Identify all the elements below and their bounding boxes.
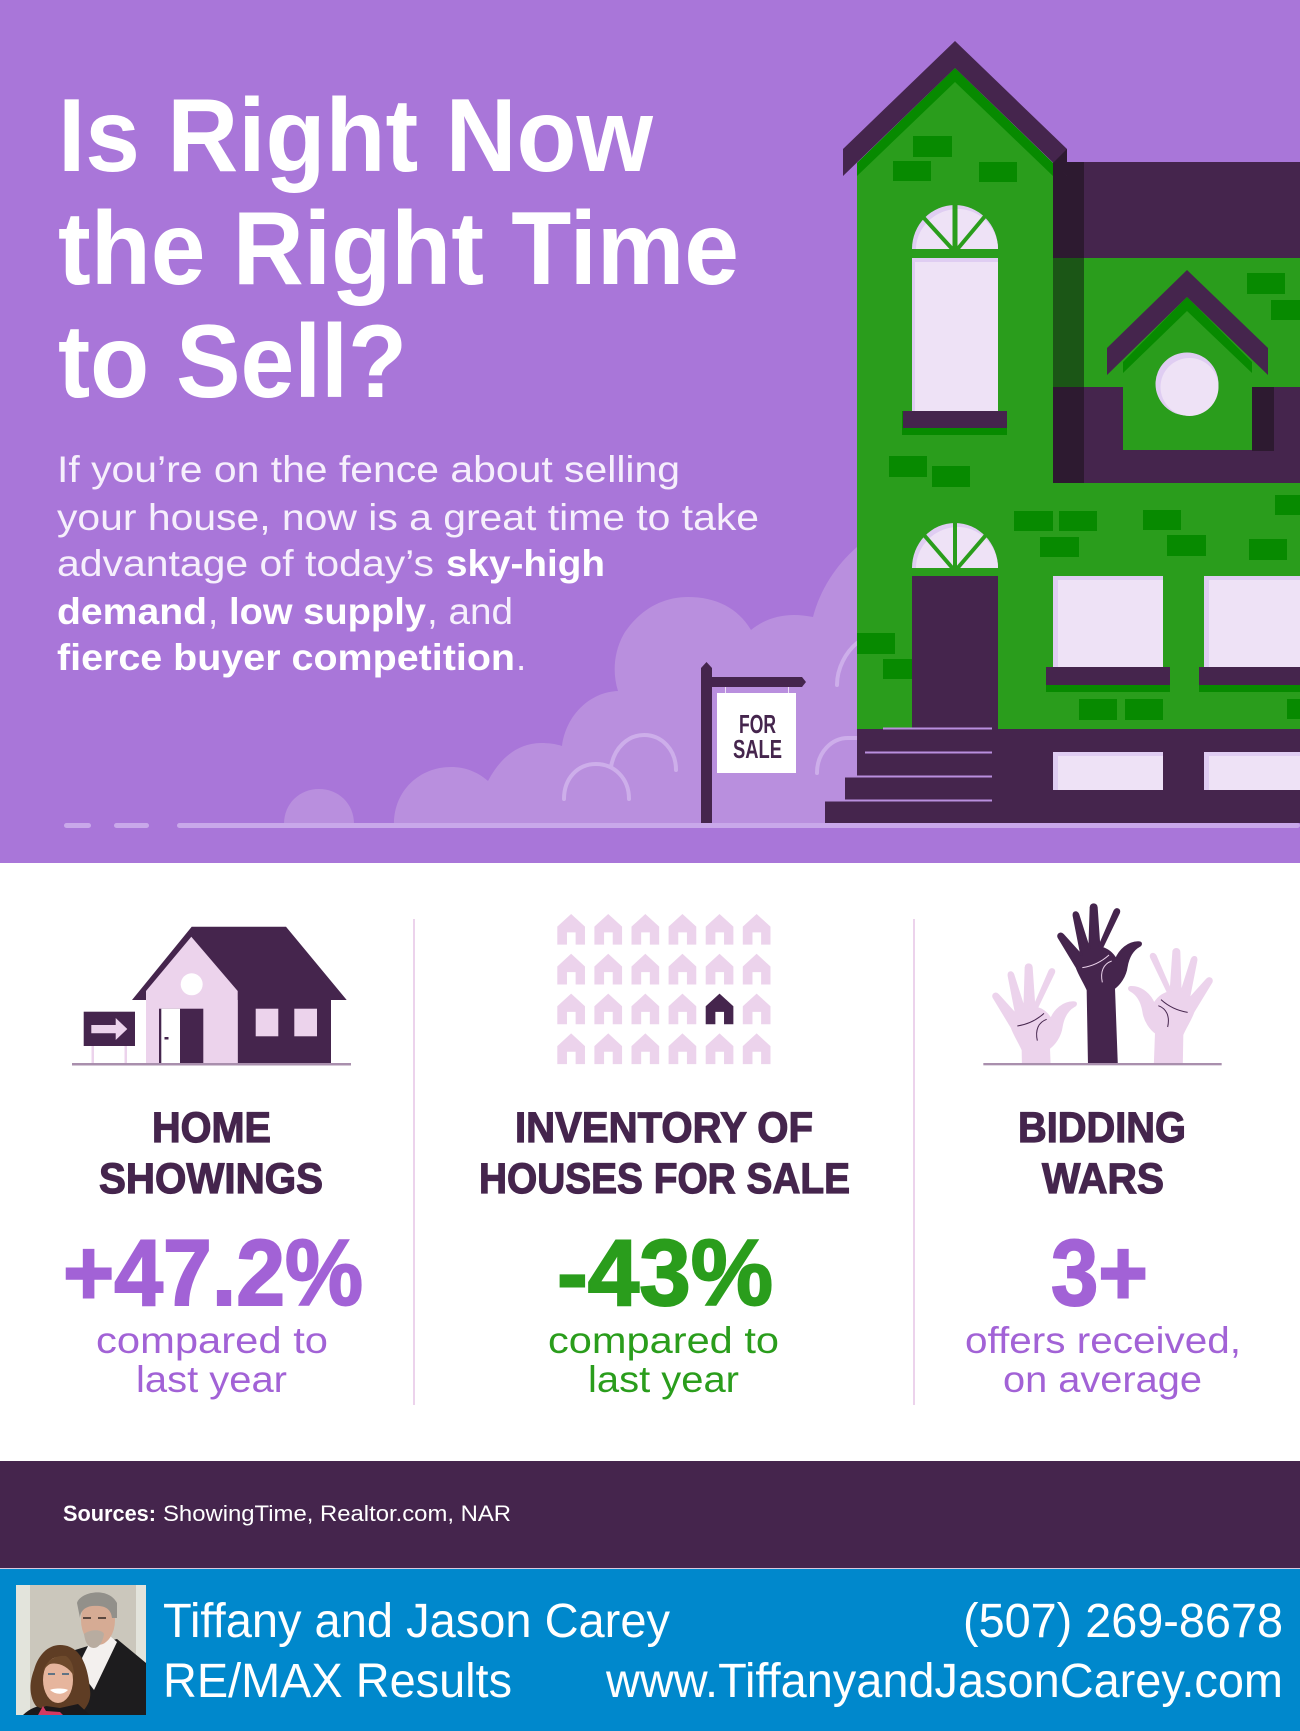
upper roof band	[1053, 162, 1300, 258]
illustration: house	[825, 41, 1300, 823]
heading: bidding wars	[1018, 1104, 1186, 1203]
green upper wall	[1053, 258, 1300, 387]
intro paragraph: ,	[208, 591, 218, 632]
sources text: Sources:	[63, 1501, 156, 1526]
intro paragraph: advantage of today’s	[57, 543, 434, 584]
caption	[965, 1320, 1241, 1400]
sources text: ShowingTime, Realtor.com, NAR	[163, 1501, 511, 1526]
heading: inventory: HOUSES FOR SALE	[479, 1155, 850, 1203]
door	[912, 576, 998, 729]
intro paragraph: demand	[57, 591, 207, 632]
agent name and brokerage: Tiffany and Jason Carey	[163, 1595, 670, 1648]
intro paragraph: sky-high	[446, 543, 605, 584]
green lower wall	[857, 483, 1300, 729]
agent photo	[16, 1585, 146, 1715]
woman	[23, 1705, 60, 1715]
panel: sources band	[0, 1461, 1300, 1568]
illustration: for sale sign	[701, 662, 806, 823]
dormer	[1123, 360, 1252, 450]
intro paragraph: your house, now is a great time to take	[57, 497, 759, 538]
stat: +47.2%: +47.2%	[63, 1220, 363, 1325]
stat: 3+: 3+	[1051, 1220, 1148, 1325]
heading: home showings	[99, 1104, 323, 1203]
caption	[96, 1320, 328, 1400]
caption: last year	[588, 1359, 739, 1400]
title: to Sell?	[58, 304, 407, 420]
illustration: cloud arcs	[564, 643, 857, 799]
caption: compared to	[96, 1320, 328, 1361]
caption	[548, 1320, 779, 1400]
man	[75, 1639, 146, 1715]
intro paragraph: low supply	[229, 591, 426, 632]
panel: bidding wars	[965, 904, 1241, 1400]
contact details: www.TiffanyandJasonCarey.com	[605, 1655, 1283, 1708]
illustration: for sale sign: FOR	[739, 709, 776, 739]
heading: home showings: HOME	[152, 1104, 271, 1152]
heading: inventory: INVENTORY OF	[515, 1104, 813, 1152]
agent name and brokerage	[163, 1595, 670, 1708]
heading: home showings: SHOWINGS	[99, 1155, 323, 1203]
caption: on average	[1003, 1359, 1202, 1400]
purple lower band	[1053, 387, 1300, 483]
contact details: (507) 269-8678	[963, 1595, 1283, 1648]
title: Is Right Now	[58, 78, 654, 194]
intro paragraph: , and	[427, 591, 513, 632]
icon: house with arrow sign	[72, 927, 351, 1066]
agent name and brokerage: RE/MAX Results	[163, 1655, 512, 1708]
intro paragraph: .	[516, 637, 526, 678]
heading: inventory	[479, 1104, 850, 1203]
illustration: ground line	[64, 823, 1300, 828]
door arch	[912, 523, 998, 568]
tower roof	[843, 41, 1067, 176]
title: the Right Time	[58, 191, 739, 307]
caption: compared to	[548, 1320, 779, 1361]
upper arched window	[912, 205, 998, 249]
tower	[857, 163, 1053, 729]
icon: raised hands	[983, 903, 1222, 1066]
panel: inventory	[479, 914, 850, 1400]
basement and steps	[857, 729, 1300, 823]
intro paragraph	[57, 449, 759, 678]
heading: bidding wars: BIDDING	[1018, 1104, 1186, 1152]
illustration: for sale sign: SALE	[733, 734, 782, 764]
intro paragraph: If you’re on the fence about selling	[57, 449, 680, 490]
title	[58, 78, 739, 420]
contact details	[605, 1595, 1283, 1708]
lower windows	[1053, 576, 1163, 667]
caption: last year	[136, 1359, 287, 1400]
basement windows	[1053, 752, 1163, 790]
panel: purple hero	[0, 0, 1300, 863]
stat: -43%: -43%	[557, 1220, 773, 1325]
caption: offers received,	[965, 1320, 1241, 1361]
panel: agent footer	[0, 1568, 1300, 1731]
intro paragraph: fierce buyer competition	[57, 637, 515, 678]
heading: bidding wars: WARS	[1042, 1155, 1164, 1203]
icon: grid of houses	[557, 914, 770, 1064]
bricks	[857, 136, 1300, 720]
panel: home showings	[63, 927, 363, 1400]
illustration: clouds	[284, 547, 857, 824]
divider	[413, 919, 915, 1405]
